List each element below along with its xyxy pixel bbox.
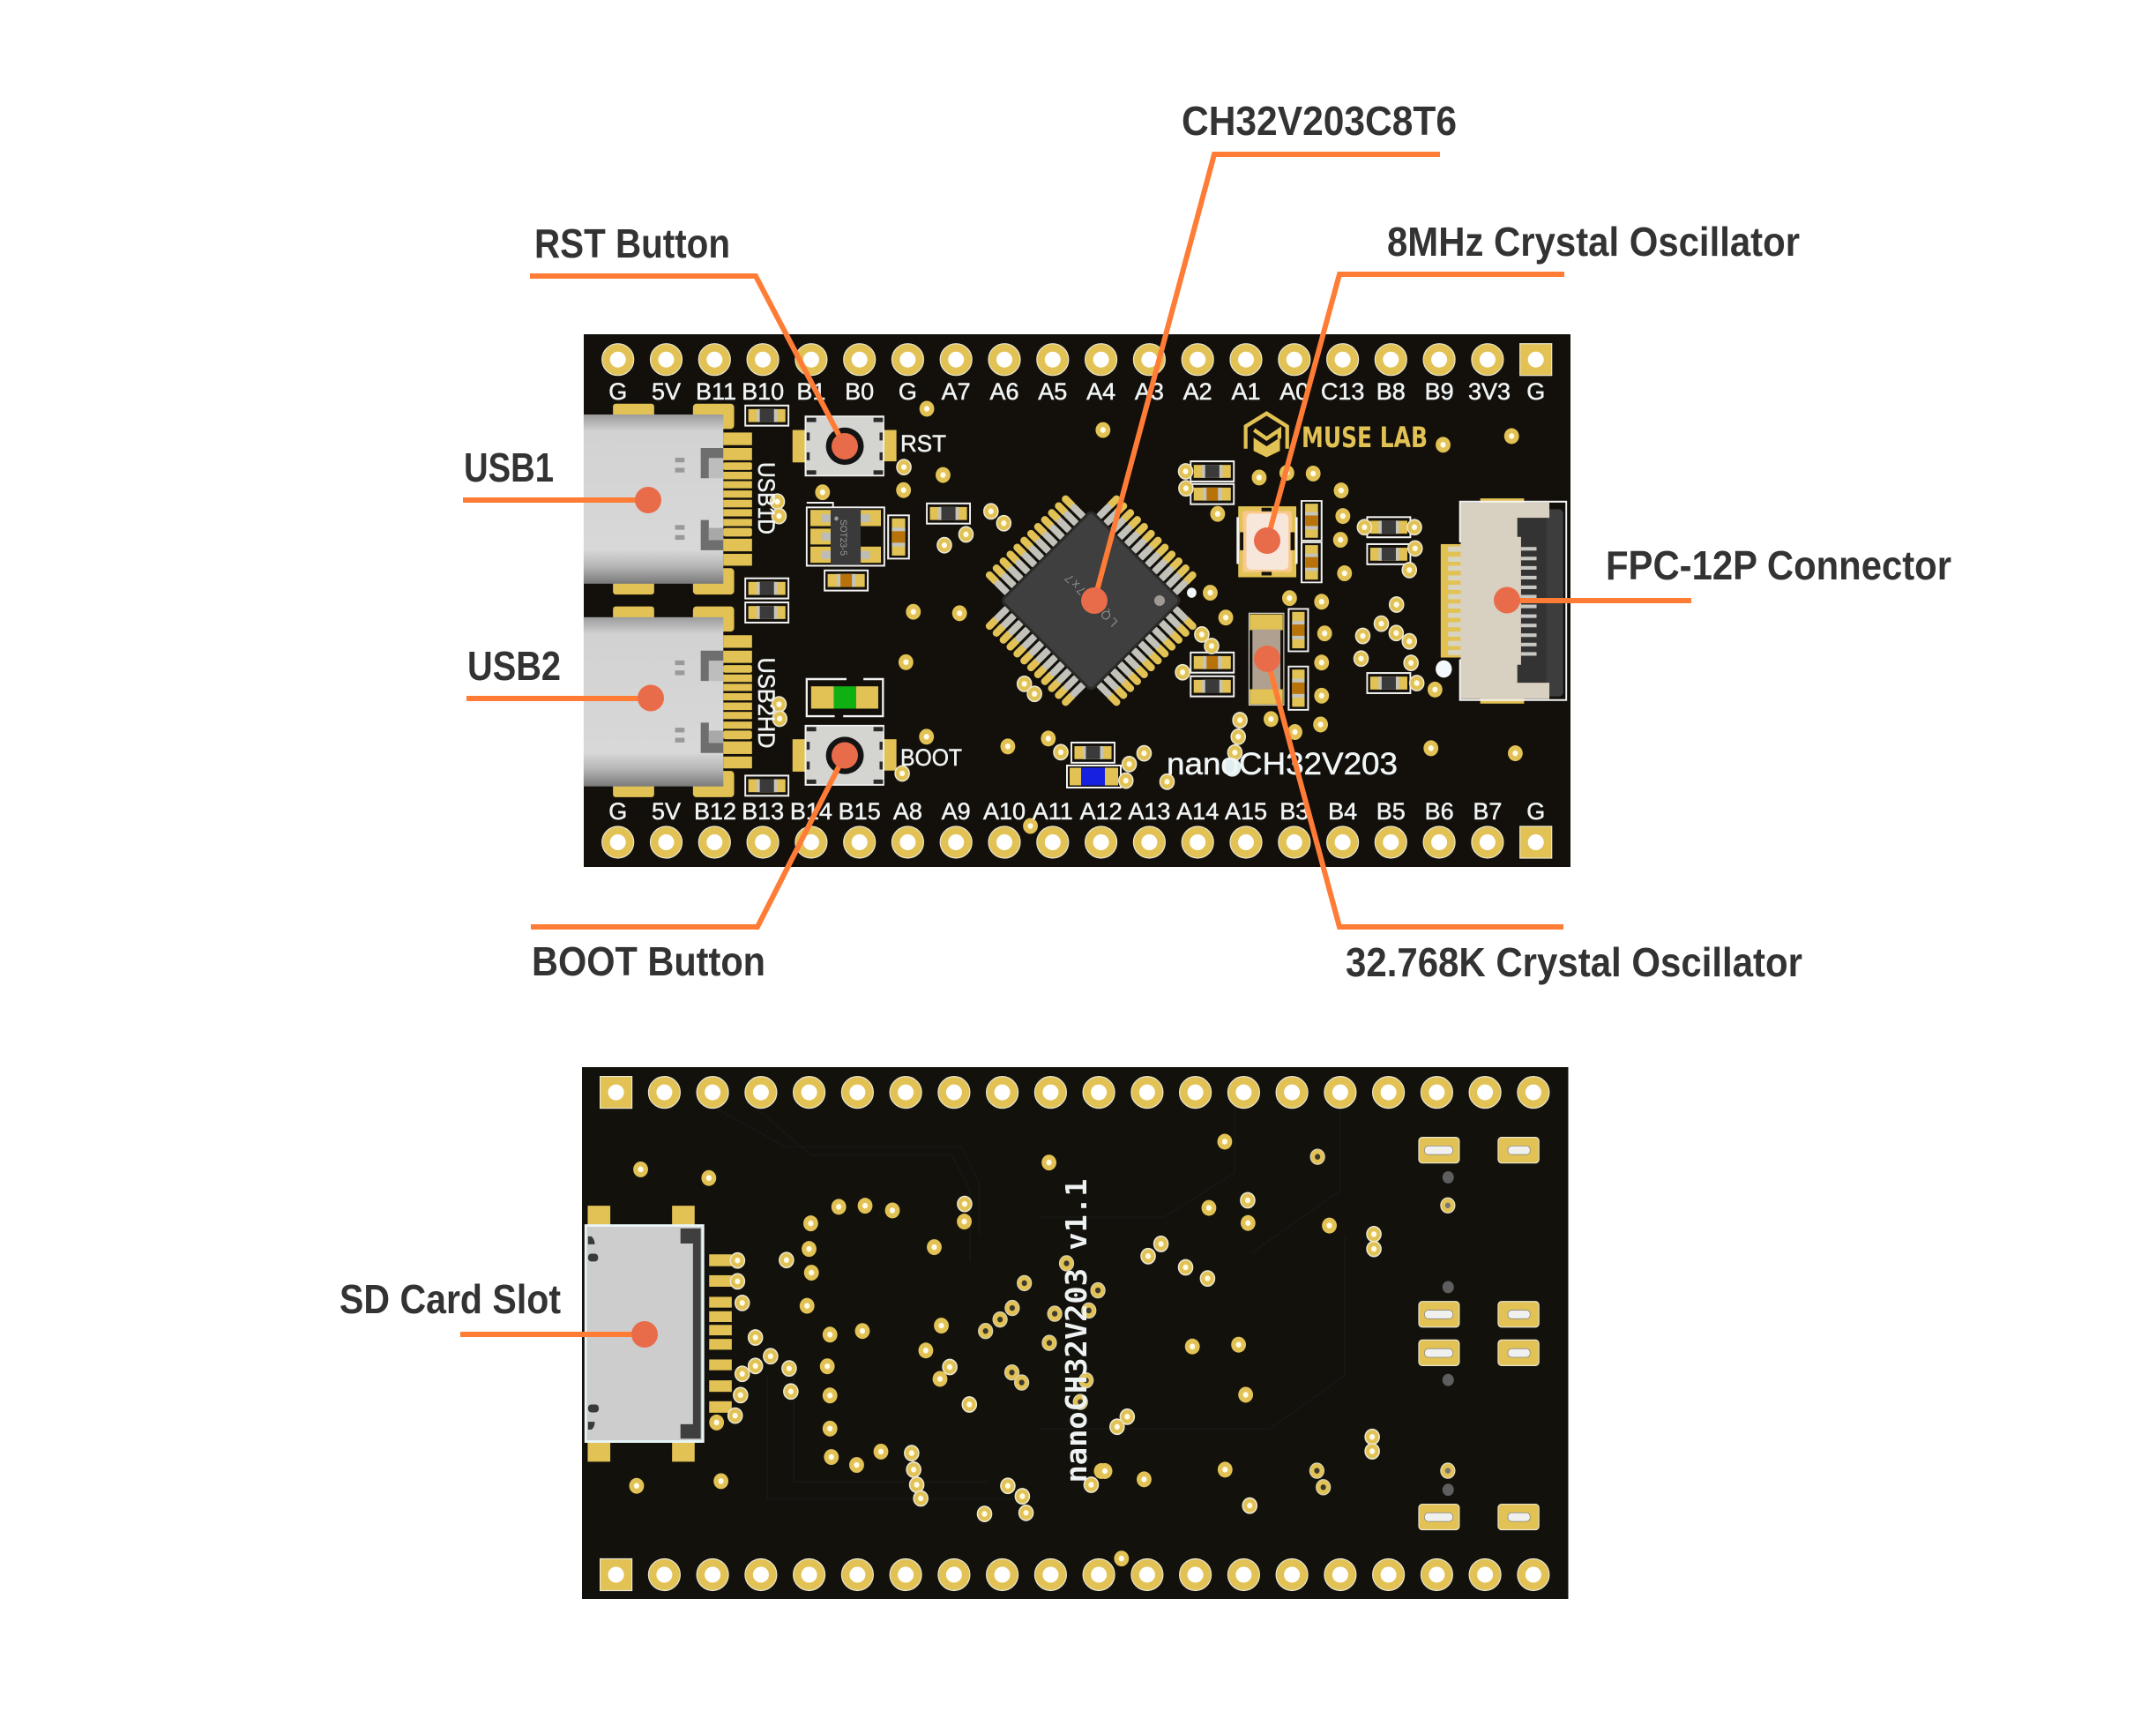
silkscreen bottom pin labels: B4 — [1328, 798, 1357, 825]
FPC-12P connector — [1441, 498, 1566, 704]
pin 1 marker — [1154, 595, 1165, 606]
callout: CH32V203C8T6: CH32V203C8T6 — [1182, 98, 1457, 144]
callout: USB1: USB1 — [464, 444, 554, 490]
silkscreen bottom pin labels: A13 — [1128, 798, 1170, 825]
Muse Lab logo icon — [1246, 414, 1287, 457]
silkscreen top pin labels: B10 — [742, 378, 784, 405]
silkscreen top pin labels: G — [608, 378, 627, 405]
front PCB board — [584, 334, 1570, 867]
callout: 8MHz Crystal Oscillator — [1254, 219, 1800, 554]
silkscreen bottom pin labels: B5 — [1376, 798, 1406, 825]
small capacitors — [745, 406, 970, 796]
vias left — [770, 400, 1110, 834]
SOT23-5 regulator — [807, 503, 884, 565]
silkscreen top pin labels: G — [899, 378, 917, 405]
silkscreen top pin labels: G — [1526, 378, 1545, 405]
silkscreen bottom pin labels: A14 — [1176, 798, 1219, 825]
silkscreen bottom pin labels: G — [608, 798, 627, 825]
callout: RST Button: RST Button — [534, 220, 730, 266]
silkscreen SOT23-5: SOT23-5 — [838, 519, 848, 556]
silkscreen top pin labels: C13 — [1321, 378, 1364, 405]
silkscreen top pin labels: A7 — [942, 378, 971, 405]
top pin header pads — [602, 344, 1552, 376]
back top row pads — [601, 1077, 1549, 1109]
status LED green — [807, 679, 883, 716]
silkscreen USB2HD: USB2HD — [753, 658, 780, 748]
silkscreen USB1D: USB1D — [753, 462, 780, 534]
callout: USB1 — [463, 444, 661, 513]
callout: 32.768K Crystal Oscillator: 32.768K Crystal Oscillator — [1346, 939, 1802, 985]
silkscreen nanoCH32V203: nanoCH32V203 — [1167, 747, 1398, 781]
callout: FPC-12P Connector: FPC-12P Connector — [1606, 542, 1951, 588]
callout: SD Card Slot: SD Card Slot — [339, 1276, 561, 1322]
callout: SD Card Slot — [339, 1276, 658, 1348]
callout: 32.768K Crystal Oscillator — [1254, 646, 1802, 985]
silkscreen top pin labels: A0 — [1279, 378, 1309, 405]
chip marking: LQFP 7x7 — [1062, 571, 1121, 630]
silkscreen bottom pin labels: B14 — [790, 798, 832, 825]
silkscreen top pin labels: A6 — [989, 378, 1019, 405]
vias right — [1119, 429, 1523, 789]
callout: CH32V203C8T6 — [1081, 98, 1457, 614]
silkscreen top pin labels: B8 — [1376, 378, 1406, 405]
silkscreen Muse Lab: MUSE LAB — [1302, 421, 1428, 454]
silkscreen bottom pin labels: A9 — [942, 798, 971, 825]
silkscreen back version text: nanoCH32V203 v1.1 — [1059, 1178, 1093, 1483]
USB1 connector — [584, 404, 752, 594]
callout: FPC-12P Connector — [1494, 542, 1951, 614]
vias back left — [630, 1154, 1108, 1521]
small cap above blue LED — [1071, 743, 1115, 763]
callout: USB2 — [466, 643, 664, 711]
silkscreen top pin labels: A2 — [1183, 378, 1212, 405]
small capacitors right — [1190, 461, 1410, 710]
callout: BOOT Button — [531, 743, 858, 984]
silkscreen bottom pin labels: A12 — [1080, 798, 1123, 825]
right half components — [1119, 414, 1566, 789]
32.768K crystal — [1249, 613, 1284, 705]
silkscreen BOOT: BOOT — [900, 744, 962, 771]
silkscreen bottom pin labels: A11 — [1033, 798, 1073, 825]
BOOT button body — [793, 726, 897, 785]
8MHz crystal — [1236, 506, 1298, 578]
silkscreen bottom pin labels: B6 — [1425, 798, 1454, 825]
silkscreen RST: RST — [900, 430, 946, 457]
silkscreen bottom pin labels: G — [1526, 798, 1545, 825]
silkscreen bottom pin labels: A15 — [1225, 798, 1267, 825]
silkscreen top pin labels: A1 — [1231, 378, 1261, 405]
silkscreen bottom pin labels: B12 — [694, 798, 736, 825]
silkscreen top pin labels: B1 — [796, 378, 825, 405]
back bottom row pads — [601, 1559, 1549, 1591]
silkscreen top pin labels: B9 — [1425, 378, 1454, 405]
silkscreen bottom pin labels: B13 — [742, 798, 784, 825]
bottom pin header pads — [602, 826, 1552, 858]
USB2 connector — [584, 607, 752, 797]
left half components — [584, 400, 1110, 834]
status LED blue — [1067, 766, 1121, 788]
silkscreen bottom pin labels — [608, 798, 1545, 825]
silkscreen top pin labels: 5V — [652, 378, 681, 405]
callout: BOOT Button: BOOT Button — [532, 938, 765, 984]
silkscreen bottom pin labels: 5V — [652, 798, 681, 825]
silkscreen bottom pin labels: A8 — [893, 798, 922, 825]
silkscreen top pin labels: A4 — [1086, 378, 1115, 405]
silkscreen top pin labels: B11 — [696, 378, 736, 405]
callout: RST Button — [530, 220, 858, 459]
RST button body — [793, 416, 897, 475]
silkscreen top pin labels — [608, 378, 1545, 405]
SD card slot — [586, 1206, 732, 1461]
silkscreen top pin labels: A5 — [1038, 378, 1067, 405]
vias back right — [1098, 1134, 1455, 1566]
silkscreen bottom pin labels: B7 — [1473, 798, 1502, 825]
callout: 8MHz Crystal Oscillator: 8MHz Crystal Oscillator — [1387, 219, 1800, 265]
QFP chip CH32V203C8T6 — [959, 468, 1223, 733]
back PCB board — [582, 1067, 1568, 1599]
silkscreen bottom pin labels: B15 — [839, 798, 881, 825]
silkscreen top pin labels: 3V3 — [1468, 378, 1511, 405]
silkscreen bottom pin labels: A10 — [983, 798, 1026, 825]
silkscreen top pin labels: B0 — [845, 378, 874, 405]
faint copper traces — [705, 1085, 1345, 1499]
USB through-hole slots — [1419, 1138, 1539, 1530]
silkscreen bottom pin labels: B3 — [1279, 798, 1309, 825]
silkscreen top pin labels: A3 — [1135, 378, 1164, 405]
callout: USB2: USB2 — [467, 643, 561, 689]
